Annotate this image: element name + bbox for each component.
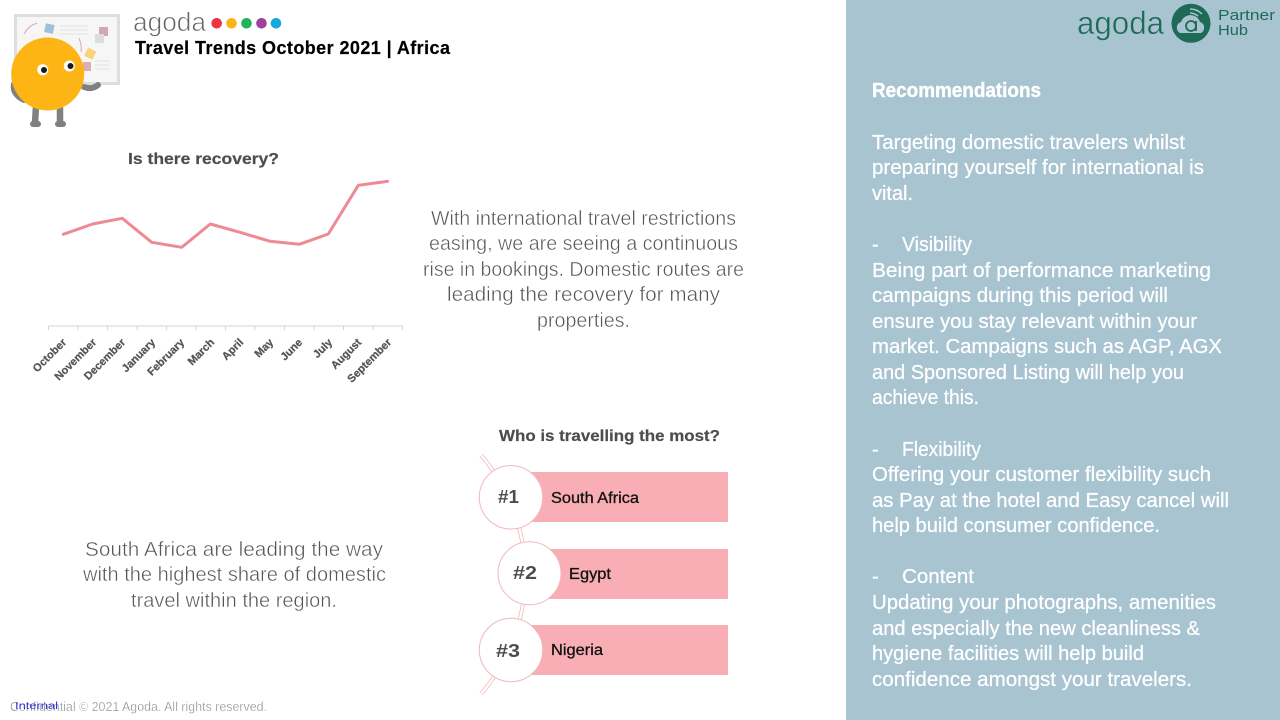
month axis labels: June <box>278 337 305 363</box>
rank 2: egypt: Egypt <box>569 566 612 583</box>
text block: south africa commentary: with the highest share of domestic <box>82 564 386 586</box>
visibility recommendation: achieve this. <box>872 387 979 409</box>
text block: south africa commentary: travel within the region. <box>131 590 337 612</box>
partner hub logo: Partner <box>1218 7 1275 24</box>
rank 1: south africa: #1 <box>498 487 519 507</box>
ranking list: top source markets <box>479 455 728 694</box>
partner hub logo: Hub <box>1218 22 1248 39</box>
text block: south africa commentary: South Africa are leading the way <box>85 539 383 561</box>
title: Travel Trends October 2021 | Africa <box>135 38 451 58</box>
intro text: vital. <box>872 183 913 205</box>
recovery trend line <box>63 181 388 247</box>
content recommendation: and especially the new cleanliness & <box>872 618 1201 640</box>
text block: recovery commentary: properties. <box>537 310 630 332</box>
mascot illustration with whiteboard <box>11 16 119 124</box>
month axis labels <box>31 336 395 385</box>
text block: recovery commentary: rise in bookings. Domestic routes are <box>423 259 744 281</box>
visibility recommendation <box>872 234 1222 409</box>
text block: recovery commentary <box>423 208 744 332</box>
rank 3: nigeria: #3 <box>496 641 520 661</box>
footer copyright: Confidential © 2021 Agoda. All rights reserved. <box>10 699 267 714</box>
visibility recommendation: Visibility <box>902 234 972 256</box>
month axis labels: March <box>186 336 217 368</box>
visibility recommendation: Being part of performance marketing <box>872 260 1211 282</box>
month axis labels: October <box>31 336 70 375</box>
month axis labels: May <box>252 336 277 360</box>
month axis labels: December <box>82 336 129 383</box>
content recommendation <box>872 566 1216 691</box>
flexibility recommendation: Flexibility <box>902 439 981 461</box>
month axis labels: February <box>145 336 188 378</box>
month axis labels: April <box>220 337 246 363</box>
month axis labels: September <box>345 336 395 385</box>
agoda logo with coloured dots: agoda <box>133 7 207 37</box>
content recommendation: - <box>872 566 879 588</box>
content recommendation: confidence amongst your travelers. <box>872 669 1192 691</box>
month axis labels: November <box>53 336 100 383</box>
month axis labels: January <box>120 336 159 375</box>
content recommendation: Updating your photographs, amenities <box>872 592 1216 614</box>
recommendations heading: Recommendations <box>872 80 1041 102</box>
visibility recommendation: campaigns during this period will <box>872 285 1168 307</box>
text block: recovery commentary: leading the recovery for many <box>447 284 720 306</box>
connector curve <box>481 455 525 694</box>
visibility recommendation: - <box>872 234 879 256</box>
rank 3: nigeria <box>479 618 728 682</box>
partner hub logo <box>1077 4 1275 43</box>
text block: recovery commentary: easing, we are seeing a continuous <box>429 233 738 255</box>
flexibility recommendation: help build consumer confidence. <box>872 515 1160 537</box>
text block: recovery commentary: With international travel restrictions <box>431 208 736 230</box>
panel: recommendations <box>846 0 1280 720</box>
rank 2: egypt: #2 <box>513 563 537 583</box>
month axis labels: July <box>311 336 336 361</box>
flexibility recommendation: - <box>872 439 879 461</box>
visibility recommendation: ensure you stay relevant within your <box>872 311 1197 333</box>
text block: south africa commentary <box>82 539 386 612</box>
internal classification label: Internal <box>15 701 58 712</box>
rank 3: nigeria: Nigeria <box>551 642 603 659</box>
visibility recommendation: market. Campaigns such as AGP, AGX <box>872 336 1222 358</box>
content recommendation: Content <box>902 566 974 588</box>
intro text: preparing yourself for international is <box>872 157 1204 179</box>
rank 1: south africa: South Africa <box>551 490 639 507</box>
rank 1: south africa <box>479 466 728 529</box>
intro text: Targeting domestic travelers whilst <box>872 132 1185 154</box>
rank 2: egypt <box>498 542 728 605</box>
intro text <box>872 132 1204 205</box>
heading: who is travelling the most: Who is travelling the most? <box>499 428 720 445</box>
flexibility recommendation: Offering your customer flexibility such <box>872 464 1211 486</box>
flexibility recommendation <box>872 439 1229 537</box>
partner hub logo: agoda <box>1077 5 1164 41</box>
visibility recommendation: and Sponsored Listing will help you <box>872 362 1184 384</box>
flexibility recommendation: as Pay at the hotel and Easy cancel will <box>872 490 1229 512</box>
agoda logo with coloured dots <box>133 7 281 37</box>
line chart: bookings recovery <box>31 181 403 385</box>
heading: is there recovery: Is there recovery? <box>128 151 279 168</box>
month axis labels: August <box>329 336 364 372</box>
content recommendation: hygiene facilities will help build <box>872 643 1144 665</box>
